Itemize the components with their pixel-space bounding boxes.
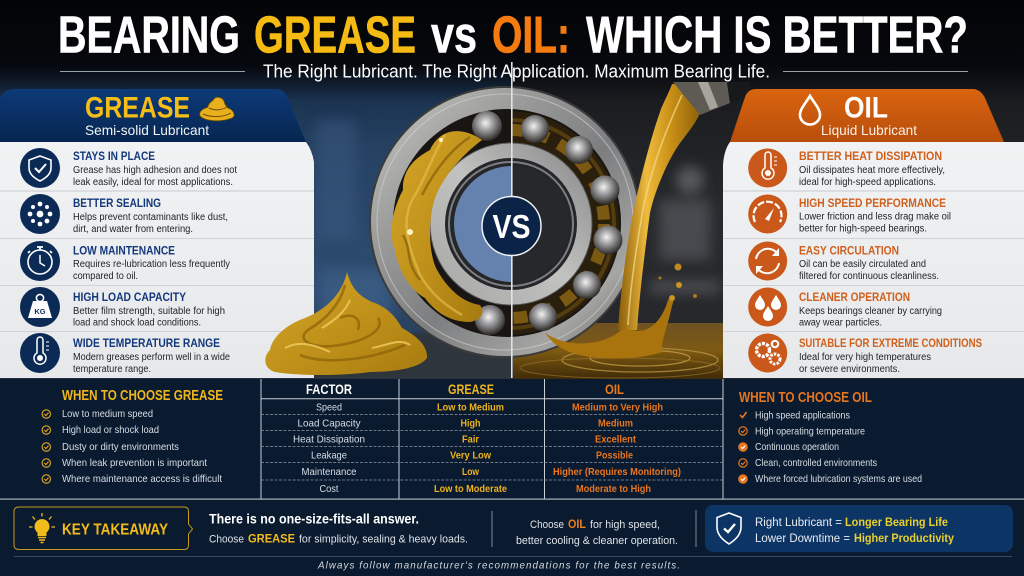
takeaway text: grease: Choose xyxy=(209,534,244,546)
callout: right lubricant: Higher Productivity xyxy=(854,533,955,545)
comparison table: FACTOR xyxy=(306,381,352,397)
right half oil film xyxy=(512,111,619,335)
when to choose grease: High load or shock load xyxy=(62,425,159,436)
when to choose oil: Where forced lubrication systems are used xyxy=(755,474,922,485)
oil header: Liquid Lubricant xyxy=(821,122,917,138)
title: GREASE xyxy=(254,6,416,64)
outer ring xyxy=(370,87,640,357)
item: wide temperature range xyxy=(20,333,230,375)
takeaway text: oil: for high speed, xyxy=(590,519,660,531)
comparison table: Low xyxy=(462,467,479,478)
when to choose oil: High operating temperature xyxy=(755,426,865,438)
bore xyxy=(454,166,570,282)
footer rule xyxy=(14,556,1012,557)
when to choose grease: Dusty or dirty environments xyxy=(62,442,179,453)
item: better sealing: dirt, and water from entering. xyxy=(73,224,193,235)
item: stays in place: Grease has high adhesion and does not xyxy=(73,165,237,176)
oil header xyxy=(730,89,1004,142)
takeaway text: oil: better cooling & cleaner operation. xyxy=(516,535,678,547)
comparison table: Leakage xyxy=(311,450,347,462)
when to choose oil xyxy=(739,390,922,485)
comparison table: Higher (Requires Monitoring) xyxy=(553,467,681,478)
takeaway text: oil: Choose xyxy=(530,519,564,531)
item: better sealing: BETTER SEALING xyxy=(73,197,161,210)
item: high load capacity: Better film strength, suitable for high xyxy=(73,306,225,317)
comparison table: High xyxy=(460,418,480,430)
when to choose oil: WHEN TO CHOOSE OIL xyxy=(739,390,872,406)
icon: shield xyxy=(717,513,741,544)
comparison table: Low to Medium xyxy=(437,402,504,414)
item: stays in place xyxy=(20,148,237,188)
item: high load capacity: HIGH LOAD CAPACITY xyxy=(73,291,186,304)
item: low maintenance xyxy=(20,241,230,282)
oil splash xyxy=(545,264,697,358)
comparison table: GREASE xyxy=(448,381,494,397)
item: easy circulation: EASY CIRCULATION xyxy=(799,244,899,258)
when to choose oil: Continuous operation xyxy=(755,442,839,453)
title: vs xyxy=(431,6,477,64)
icon: light bulb xyxy=(29,513,55,542)
item: high load capacity: KG xyxy=(34,307,46,316)
VS badge: VS xyxy=(492,208,530,245)
item: stays in place: leak easily, ideal for most applications. xyxy=(73,177,233,188)
comparison table: Medium to Very High xyxy=(572,402,663,414)
item: high speed performance: HIGH SPEED PERFORMANCE xyxy=(799,197,946,210)
comparison table: Maintenance xyxy=(302,467,357,478)
item: better sealing xyxy=(20,194,228,235)
takeaway text: grease: for simplicity, sealing & heavy loads. xyxy=(299,534,468,546)
when to choose grease: WHEN TO CHOOSE GREASE xyxy=(62,388,223,404)
item: easy circulation: filtered for continuous cleanliness. xyxy=(799,271,939,282)
title xyxy=(58,6,968,64)
item: suitable for extreme conditions: or severe environments. xyxy=(799,364,900,375)
item: cleaner operation: away wear particles. xyxy=(799,318,882,328)
item: high load capacity: load and shock load conditions. xyxy=(73,318,201,328)
item: high speed performance: better for high-speed bearings. xyxy=(799,224,927,234)
title: BEARING xyxy=(58,6,240,64)
item: suitable for extreme conditions: SUITABLE FOR EXTREME CONDITIONS xyxy=(799,337,982,350)
title: OIL: xyxy=(492,6,570,64)
oil header: OIL xyxy=(844,92,888,124)
item: better heat dissipation: BETTER HEAT DISSIPATION xyxy=(799,150,942,163)
when to choose grease: Where maintenance access is difficult xyxy=(62,474,222,485)
when to choose oil: High speed applications xyxy=(755,410,850,422)
comparison table: Excellent xyxy=(595,434,637,446)
comparison table: OIL xyxy=(605,381,624,397)
grease header: GREASE xyxy=(85,92,190,124)
comparison table: Speed xyxy=(316,402,342,414)
callout: right lubricant xyxy=(705,505,1013,552)
grease in bearing xyxy=(392,131,482,322)
panel: oil xyxy=(723,89,1024,378)
grease blob xyxy=(265,272,427,375)
takeaway text: oil xyxy=(516,519,678,547)
item: easy circulation: Oil can be easily circulated and xyxy=(799,259,926,270)
comparison table: Medium xyxy=(598,418,633,430)
item: easy circulation xyxy=(748,242,939,282)
takeaway dividers xyxy=(492,510,696,547)
oil stream xyxy=(618,84,700,330)
center divider line xyxy=(511,62,513,378)
item: wide temperature range: temperature range. xyxy=(73,364,151,375)
callout: right lubricant: Longer Bearing Life xyxy=(845,517,948,529)
item: suitable for extreme conditions: Ideal for very high temperatures xyxy=(799,352,931,363)
comparison table: Low to Moderate xyxy=(434,484,507,495)
footer note: Always follow manufacturer's recommendations for the best results. xyxy=(317,560,680,572)
when to choose grease xyxy=(42,388,223,485)
comparison table: Very Low xyxy=(450,450,491,462)
comparison table: Heat Dissipation xyxy=(293,434,365,446)
item: better heat dissipation: Oil dissipates heat more effectively, xyxy=(799,165,945,176)
item: low maintenance: LOW MAINTENANCE xyxy=(73,244,175,258)
grease header: Semi-solid Lubricant xyxy=(85,122,209,138)
bottom background xyxy=(0,379,1024,576)
comparison table xyxy=(261,379,723,499)
takeaway text: grease: GREASE xyxy=(248,532,295,546)
item: stays in place: STAYS IN PLACE xyxy=(73,150,155,163)
callout: right lubricant: Lower Downtime = xyxy=(755,533,850,545)
panel: grease xyxy=(0,89,314,378)
callout: right lubricant: Right Lubricant = xyxy=(755,517,842,529)
item: high speed performance: Lower friction and less drag make oil xyxy=(799,212,951,222)
comparison table: Load Capacity xyxy=(298,418,361,430)
key takeaway badge: KEY TAKEAWAY xyxy=(62,522,168,538)
oil pool xyxy=(513,323,723,379)
item: cleaner operation: CLEANER OPERATION xyxy=(799,291,910,304)
item: wide temperature range: Modern greases perform well in a wide xyxy=(73,352,230,363)
item: suitable for extreme conditions xyxy=(748,334,982,375)
item: wide temperature range: WIDE TEMPERATURE RANGE xyxy=(73,337,220,350)
grease header xyxy=(0,89,306,142)
when to choose oil: Clean, controlled environments xyxy=(755,458,877,469)
item: high load capacity xyxy=(20,287,225,328)
when to choose grease: When leak prevention is important xyxy=(62,458,207,469)
section divider xyxy=(0,498,1024,500)
when to choose grease: Low to medium speed xyxy=(62,409,153,420)
VS badge xyxy=(482,196,541,256)
item: cleaner operation: Keeps bearings cleaner by carrying xyxy=(799,306,942,317)
takeaway text: grease xyxy=(209,512,468,546)
item: low maintenance: Requires re-lubrication less frequently xyxy=(73,259,230,270)
takeaway text: oil: OIL xyxy=(568,519,586,531)
comparison table: Possible xyxy=(596,450,633,462)
balls xyxy=(472,111,622,335)
takeaway text: grease: There is no one-size-fits-all answer. xyxy=(209,512,419,526)
item: high speed performance xyxy=(748,194,951,234)
item: better heat dissipation: ideal for high-speed applications. xyxy=(799,177,936,188)
subtitle: The Right Lubricant. The Right Application. Maximum Bearing Life. xyxy=(263,62,770,82)
item: low maintenance: compared to oil. xyxy=(73,271,138,282)
item: better sealing: Helps prevent contaminants like dust, xyxy=(73,212,228,223)
comparison table: Fair xyxy=(462,434,479,446)
inner ring xyxy=(430,143,592,305)
comparison table: Cost xyxy=(320,484,339,495)
key takeaway badge xyxy=(14,507,192,550)
comparison table: Moderate to High xyxy=(576,484,651,495)
item: cleaner operation xyxy=(748,288,942,328)
oil nozzle xyxy=(673,82,750,115)
bearing illustration xyxy=(370,87,640,357)
item: better heat dissipation xyxy=(748,148,945,188)
